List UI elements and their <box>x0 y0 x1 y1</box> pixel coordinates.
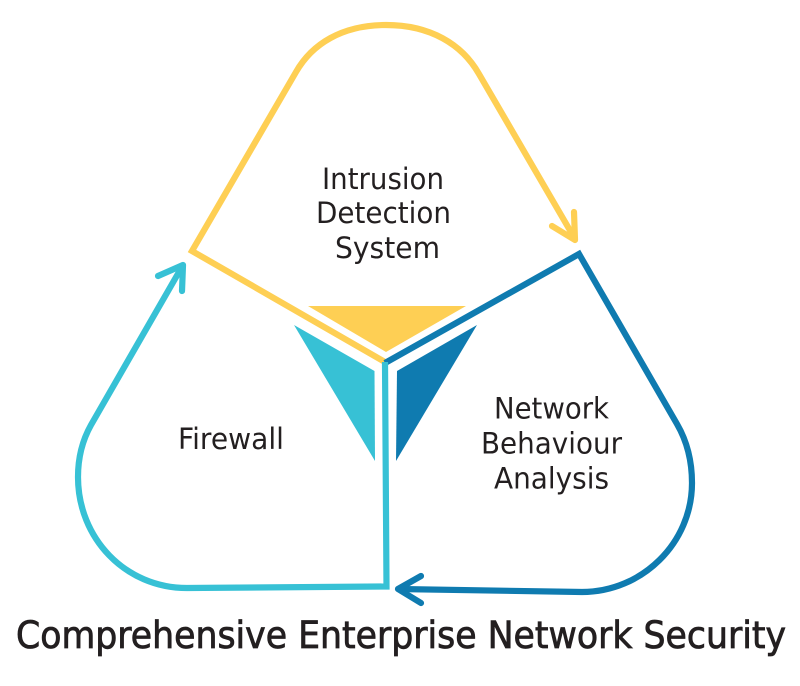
triangle: yellow <box>308 306 466 352</box>
panel: intrusion detection loop <box>192 25 575 362</box>
label: intrusion detection system <box>316 162 451 265</box>
triangle: cyan <box>294 325 375 461</box>
label: network behaviour analysis: Network <box>494 392 609 426</box>
panel: firewall loop <box>78 265 386 588</box>
panel: network behaviour loop <box>385 254 692 603</box>
label: network behaviour analysis: Behaviour <box>481 426 623 460</box>
label: intrusion detection system: System <box>335 231 440 265</box>
label: network behaviour analysis: Analysis <box>494 462 609 496</box>
triangle: blue <box>396 325 477 461</box>
label: firewall: Firewall <box>178 422 284 456</box>
label: intrusion detection system: Detection <box>316 196 451 230</box>
label: network behaviour analysis <box>481 392 623 496</box>
label: intrusion detection system: Intrusion <box>322 162 444 196</box>
